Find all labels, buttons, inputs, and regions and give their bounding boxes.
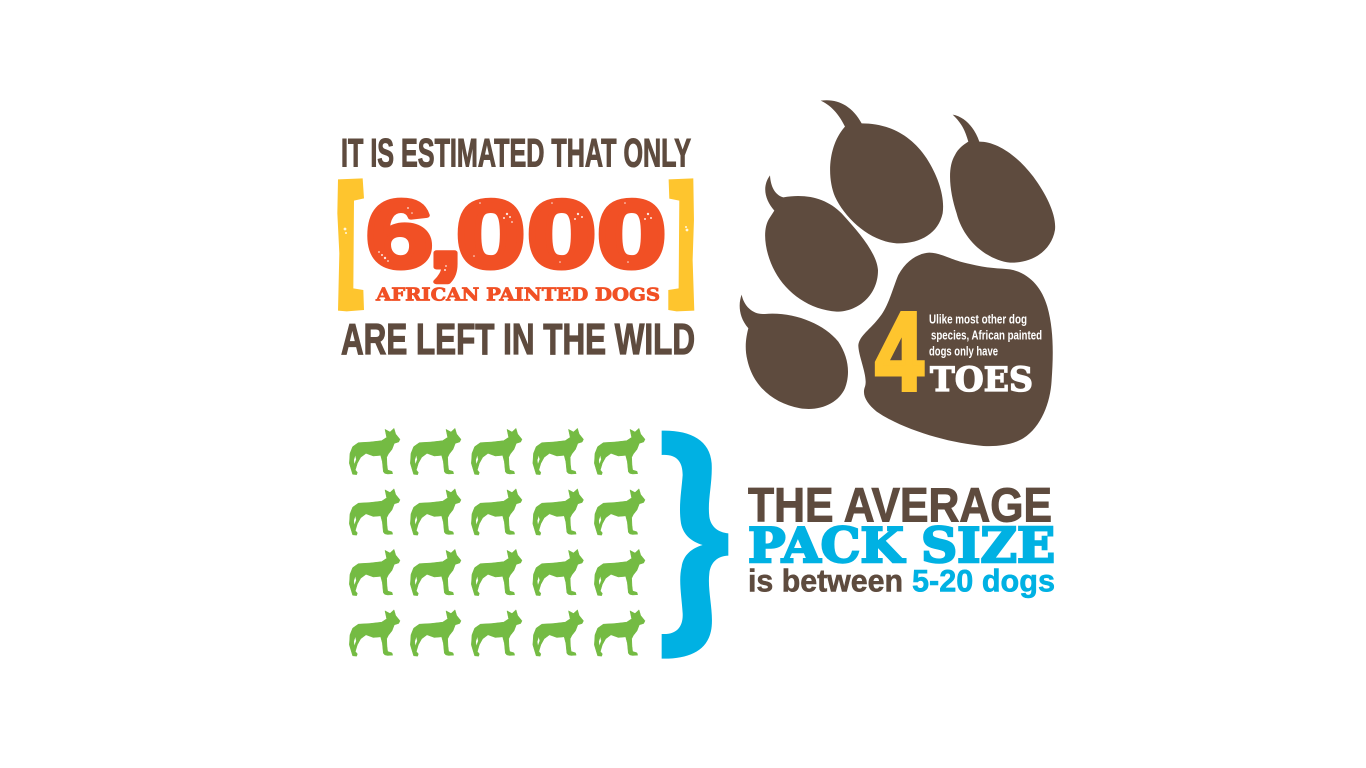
icon: blue curly brace: [662, 431, 728, 659]
row 4 of dogs: [349, 610, 645, 656]
big number: 6,000: 0: [527, 180, 596, 288]
chart: pack of twenty dog icons: [349, 428, 645, 656]
texture: speckles on number: [344, 202, 688, 271]
text: toes description: Ulike most other dog: [929, 312, 1027, 326]
big number: 6,000: 0: [597, 180, 666, 288]
heading: pack size: PACK SIZE: [748, 518, 1055, 574]
panel: population estimate: [337, 132, 695, 364]
label: toes: TOES: [930, 360, 1033, 400]
big number: 6,000: [366, 180, 666, 288]
big number: 6,000: ,: [428, 180, 463, 288]
icon: left yellow bracket: [337, 178, 364, 311]
big number: 6,000: 0: [456, 180, 525, 288]
subheading: african painted dogs: AFRICAN PAINTED DOGS: [375, 284, 660, 306]
text: 5-20 dogs: 5-20 dogs: [912, 562, 1055, 598]
text: is between: is between: [748, 562, 903, 598]
row 3 of dogs: [349, 549, 645, 596]
row 1 of dogs: [349, 428, 645, 475]
text: toes description: dogs only have: [929, 344, 998, 358]
heading: the average: THE AVERAGE: [748, 478, 1052, 532]
icon: paw toes and pad: [740, 100, 1055, 446]
heading: are left in the wild: ARE LEFT IN THE WILD: [341, 316, 695, 364]
icon: right yellow bracket: [668, 178, 694, 311]
big number: 6,000: 6: [366, 181, 433, 288]
panel: paw print: [740, 100, 1055, 446]
row 2 of dogs: [349, 489, 645, 535]
heading: it is estimated that only: IT IS ESTIMATED THAT ONLY: [341, 132, 691, 176]
panel: pack size text: [748, 478, 1055, 598]
text: toes description: [929, 312, 1042, 358]
text: toes description: species, African painted: [931, 328, 1042, 342]
big number: 4: 4: [876, 290, 923, 413]
